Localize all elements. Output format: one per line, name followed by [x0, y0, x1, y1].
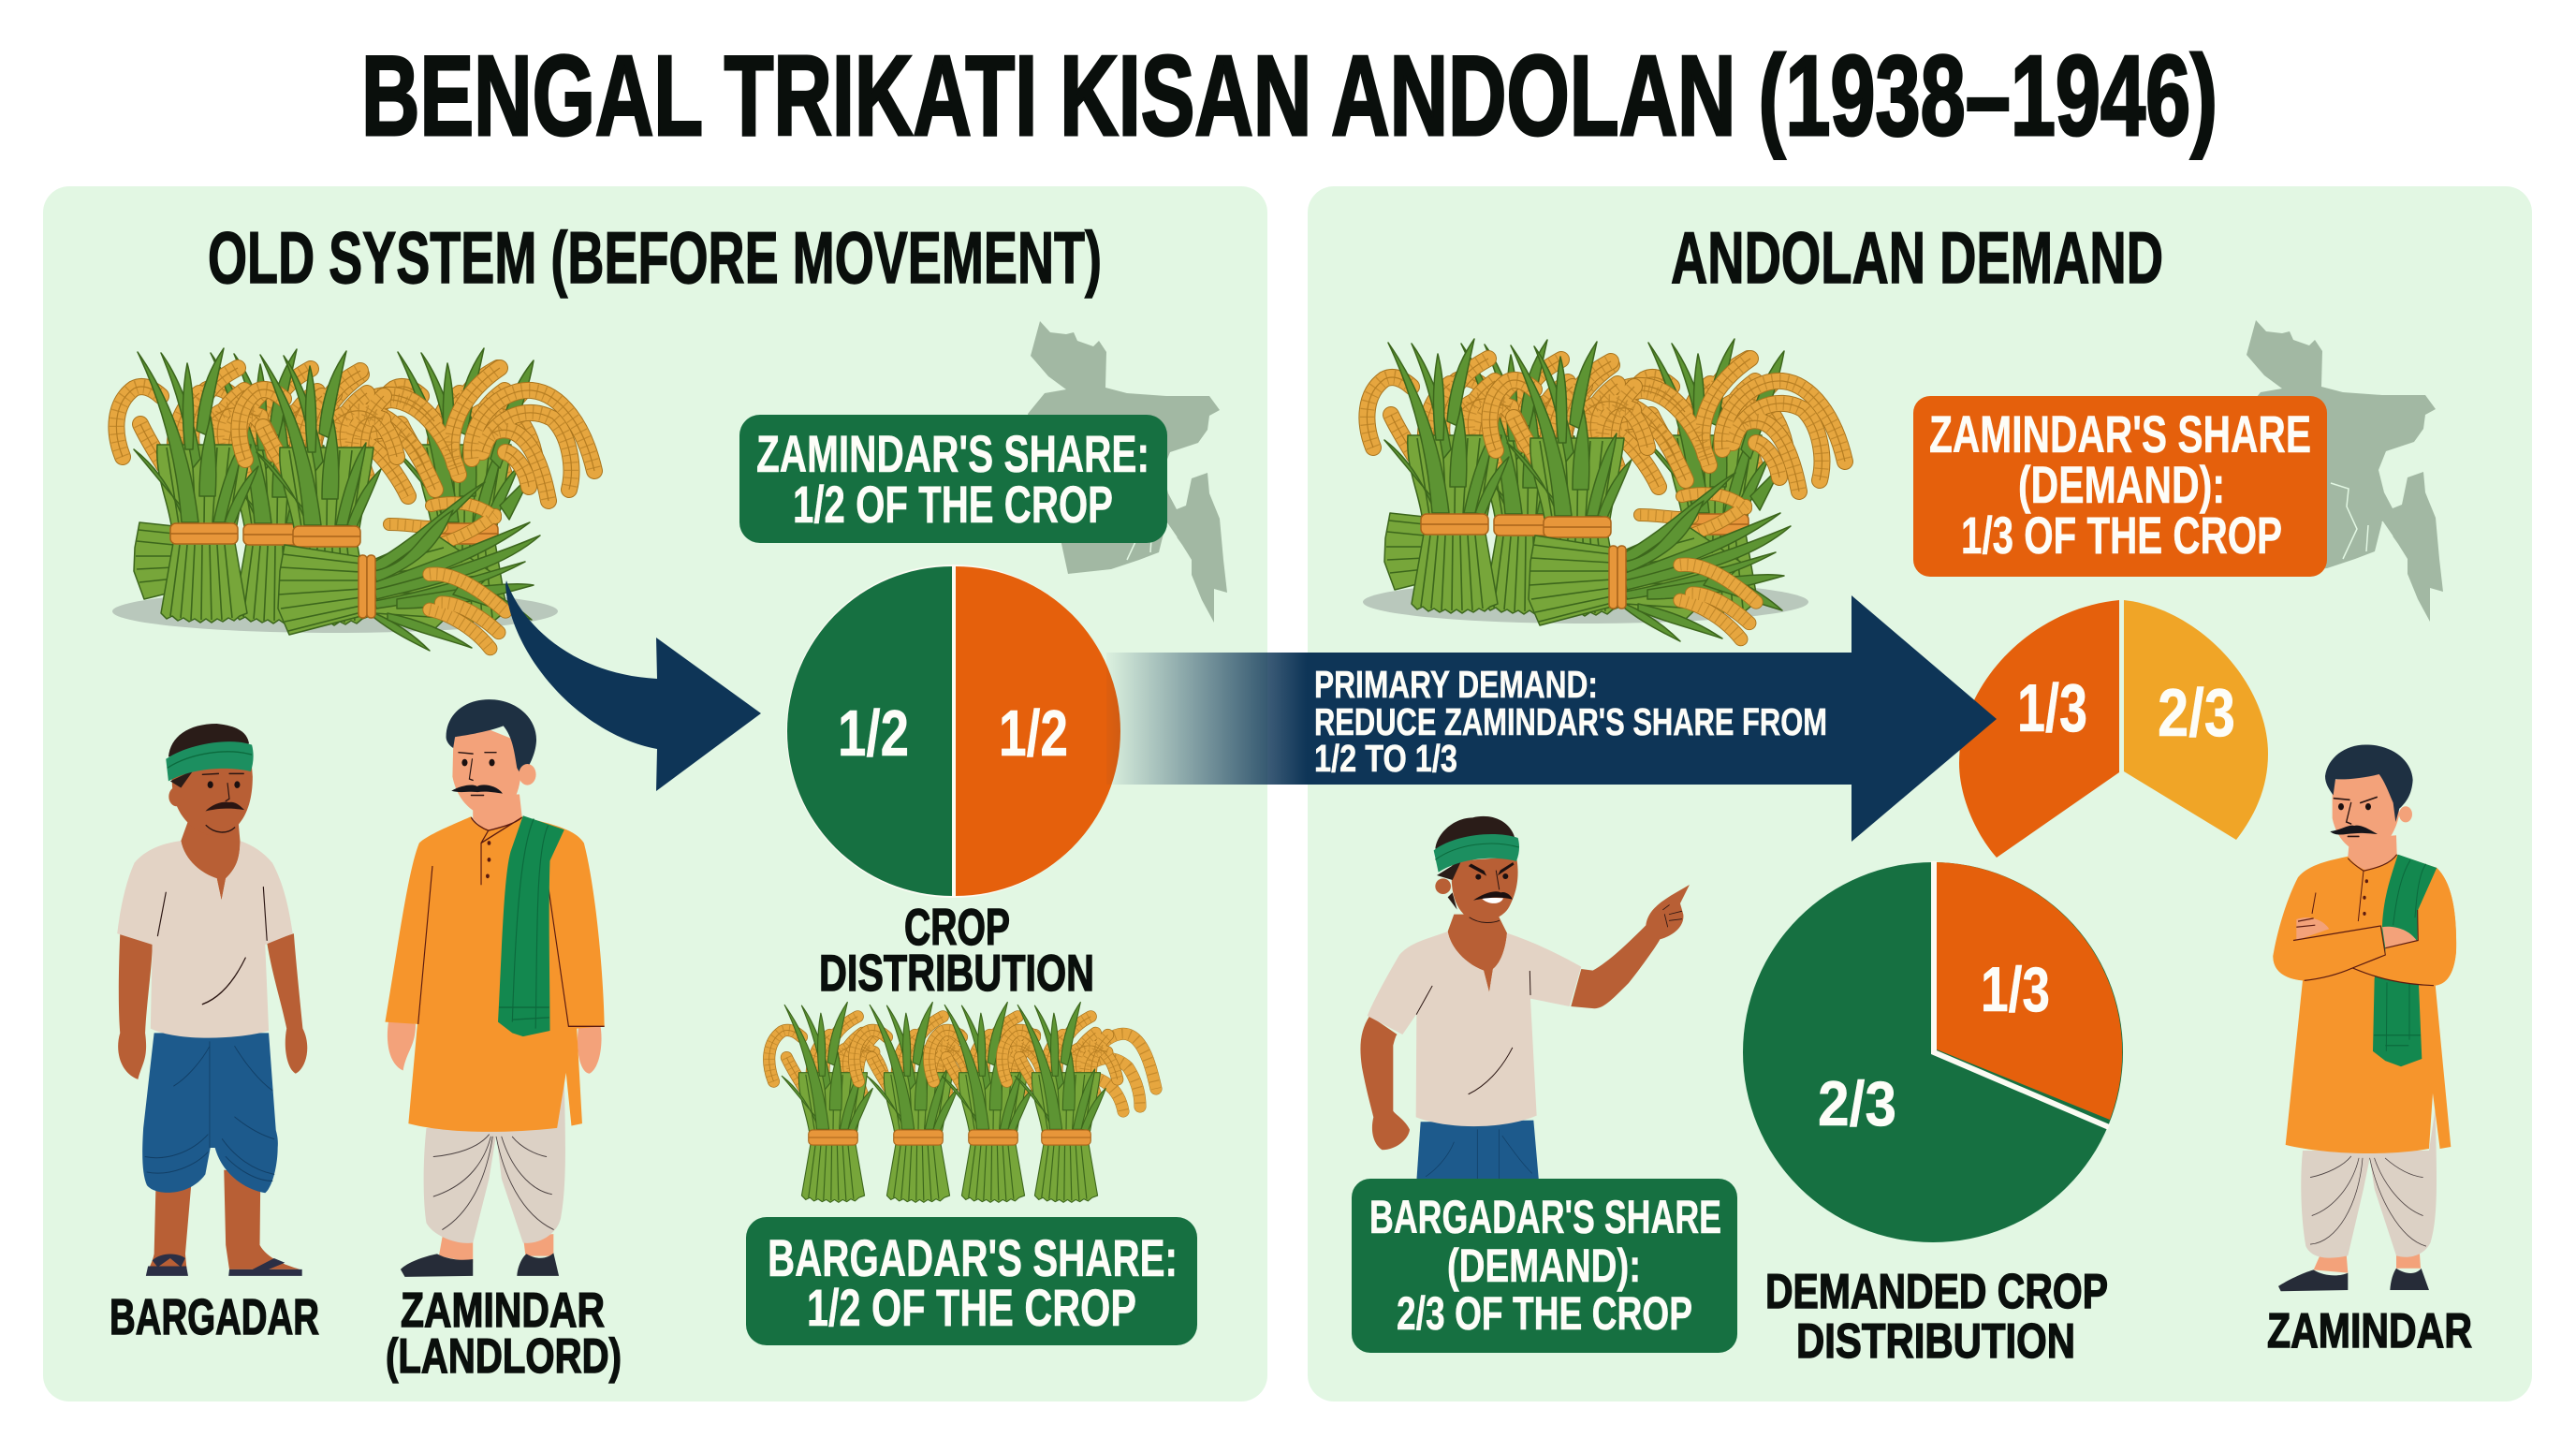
- arrow text: primary demand: REDUCE ZAMINDAR'S SHARE FROM: [1314, 700, 1827, 743]
- callout: bargadar's share: BARGADAR'S SHARE:: [768, 1228, 1178, 1287]
- icon: Bengal map: [2244, 320, 2443, 622]
- pie chart: exploded shares: 1/3: [2017, 671, 2087, 746]
- arrow text: primary demand: PRIMARY DEMAND:: [1314, 663, 1598, 706]
- callout: zamindar's share demand: 1/3 OF THE CROP: [1961, 506, 2282, 565]
- callout: zamindar's share demand: ZAMINDAR'S SHARE: [1929, 404, 2311, 463]
- icon: four small rice sheaves: [769, 1002, 1156, 1202]
- label: demanded crop distribution: DISTRIBUTION: [1796, 1314, 2075, 1369]
- callout: bargadar's share demand: [1352, 1179, 1737, 1353]
- label: zamindar landlord: [386, 1284, 622, 1384]
- arrow: primary demand: [1106, 595, 1997, 842]
- label: demanded crop distribution: DEMANDED CROP: [1765, 1265, 2108, 1319]
- label: demanded crop distribution: [1765, 1265, 2108, 1369]
- figure: bargadar pointing: [1360, 816, 1690, 1181]
- arrow text: primary demand: 1/2 TO 1/3: [1314, 737, 1457, 780]
- pie chart: demanded crop distribution: 1/3: [1981, 954, 2050, 1025]
- label: crop distribution: CROP: [904, 898, 1010, 956]
- callout: zamindar's share demand: [1913, 396, 2327, 577]
- callout: bargadar's share: 1/2 OF THE CROP: [807, 1278, 1136, 1337]
- heading: andolan demand: ANDOLAN DEMAND: [1671, 216, 2163, 299]
- icon: large rice bundle: [112, 348, 594, 651]
- figure: zamindar landlord: [385, 699, 605, 1277]
- icon: large rice bundle: [1363, 339, 1845, 641]
- label: crop distribution: DISTRIBUTION: [819, 944, 1094, 1002]
- pie chart: crop distribution: 1/2: [999, 697, 1068, 770]
- label: zamindar: ZAMINDAR: [2267, 1304, 2472, 1358]
- callout: bargadar's share demand: 2/3 OF THE CROP: [1397, 1287, 1692, 1340]
- label: crop distribution: [819, 898, 1094, 1002]
- figure: bargadar: [117, 724, 307, 1276]
- pie chart: demanded crop distribution: [1743, 861, 2123, 1242]
- callout: zamindar's share: 1/2 OF THE CROP: [793, 475, 1113, 534]
- panel background: andolan demand: [1308, 186, 2532, 1401]
- panel background: old system: [43, 186, 1267, 1401]
- pie chart: exploded shares: 2/3: [2158, 676, 2235, 751]
- label: zamindar landlord: ZAMINDAR: [401, 1284, 605, 1338]
- callout: zamindar's share: [739, 415, 1167, 543]
- label: bargadar: BARGADAR: [110, 1289, 319, 1345]
- arrow text: primary demand: [1314, 663, 1827, 780]
- curved arrow from rice to pie: [505, 580, 761, 791]
- pie chart: crop distribution: [786, 565, 1120, 898]
- pie chart: crop distribution: 1/2: [838, 697, 909, 770]
- callout: bargadar's share demand: BARGADAR'S SHARE: [1369, 1191, 1721, 1243]
- callout: bargadar's share: [746, 1217, 1197, 1345]
- pie chart: exploded shares: [1959, 600, 2268, 858]
- icon: Bengal map: [1028, 321, 1227, 623]
- pie chart: demanded crop distribution: 2/3: [1818, 1068, 1896, 1139]
- callout: zamindar's share: ZAMINDAR'S SHARE:: [756, 424, 1149, 483]
- callout: zamindar's share demand: (DEMAND):: [2018, 455, 2225, 514]
- figure: zamindar arms crossed: [2273, 744, 2456, 1291]
- label: zamindar landlord: (LANDLORD): [386, 1329, 622, 1384]
- heading: old system: OLD SYSTEM (BEFORE MOVEMENT): [208, 216, 1102, 299]
- panel: old system: [43, 186, 1267, 1401]
- panel: andolan demand: [1308, 186, 2532, 1401]
- callout: bargadar's share demand: (DEMAND):: [1447, 1240, 1641, 1292]
